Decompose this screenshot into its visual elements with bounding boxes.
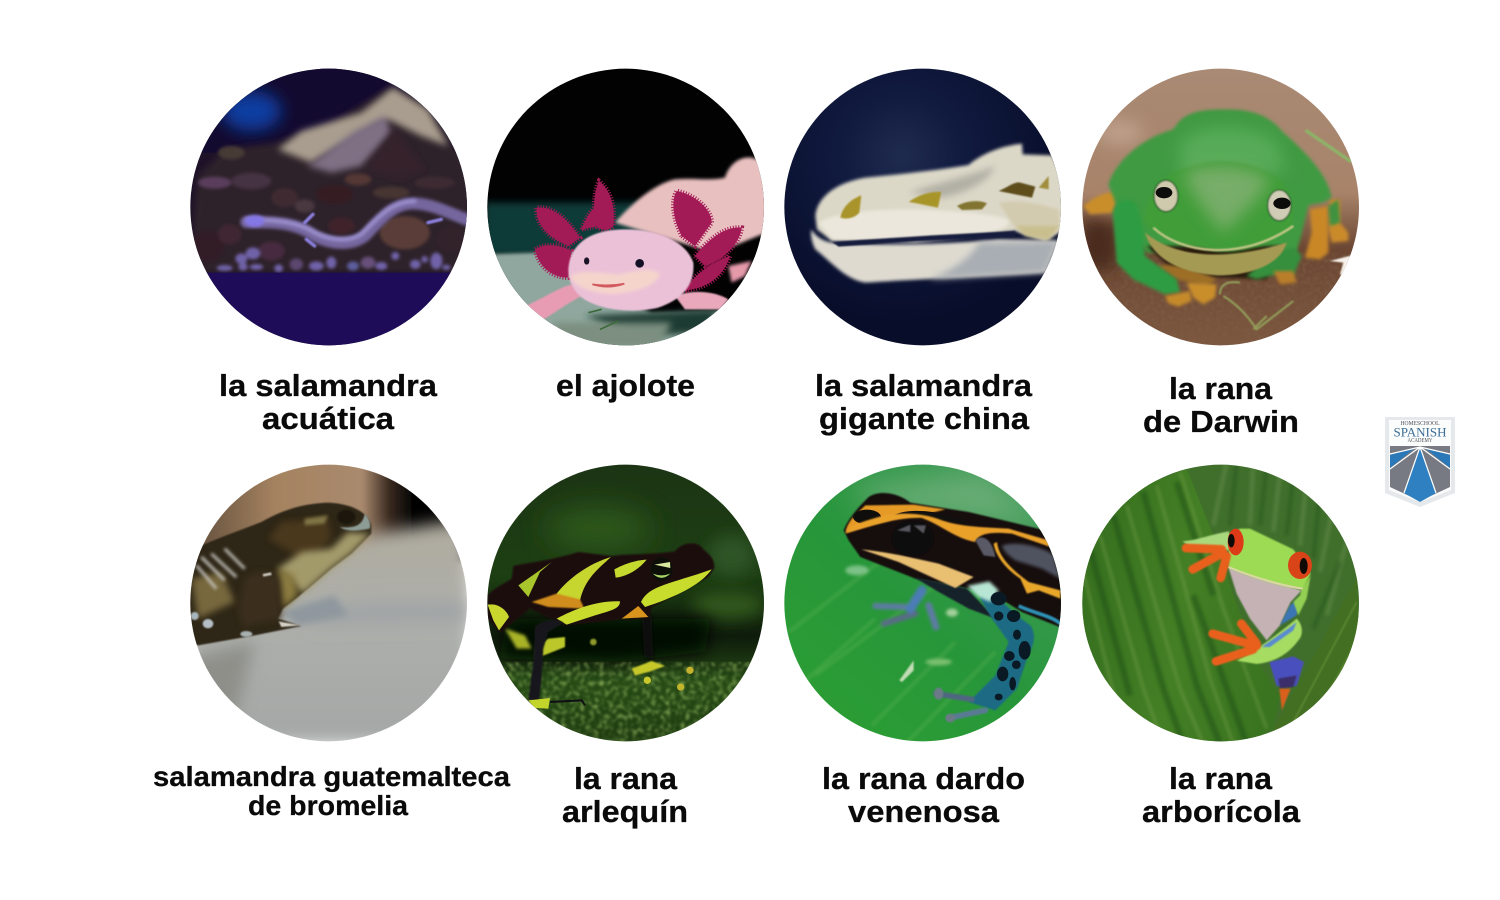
logo: Homeschool Spanish Academy shield: HOMESCHOOL — [1400, 421, 1440, 427]
photo: salamandra guatemalteca de bromelia — [188, 462, 470, 744]
logo: Homeschool Spanish Academy shield — [1385, 417, 1455, 507]
label: la rana arlequín: arlequín — [562, 794, 688, 829]
label: la salamandra acuática: acuática — [262, 401, 395, 436]
label: la salamandra gigante china: gigante china — [819, 401, 1030, 436]
photo: la rana de Darwin — [1080, 66, 1362, 349]
label: la salamandra acuática: la salamandra — [219, 368, 438, 403]
label: la rana arlequín — [562, 761, 688, 829]
label: la rana de Darwin: de Darwin — [1143, 404, 1299, 439]
logo: Homeschool Spanish Academy shield: SPANISH — [1394, 426, 1446, 440]
label: la rana arborícola: la rana — [1169, 761, 1273, 796]
label: la rana de Darwin — [1143, 371, 1299, 439]
label: la rana arlequín: la rana — [574, 761, 678, 796]
photo: la salamandra acuática — [188, 66, 470, 348]
photo: la rana dardo venenosa — [782, 462, 1064, 744]
photo: la rana arlequín — [485, 462, 767, 745]
label: la rana dardo venenosa — [822, 761, 1025, 829]
label: salamandra guatemalteca de bromelia: salamandra guatemalteca — [153, 761, 510, 792]
label: la salamandra gigante china: la salamandra — [815, 368, 1033, 403]
label: la rana dardo venenosa: venenosa — [848, 794, 1000, 829]
label: salamandra guatemalteca de bromelia: de bromelia — [248, 790, 408, 821]
label: la rana arborícola: arborícola — [1142, 794, 1301, 829]
label: la rana arborícola — [1142, 761, 1301, 829]
label: salamandra guatemalteca de bromelia — [153, 761, 510, 821]
label: la salamandra gigante china — [815, 368, 1033, 436]
photo: la rana arborícola — [1080, 462, 1362, 744]
label: la rana dardo venenosa: la rana dardo — [822, 761, 1025, 796]
photo: el ajolote — [485, 66, 767, 348]
logo: Homeschool Spanish Academy shield: ACADEMY — [1408, 438, 1433, 444]
photo: la salamandra gigante china — [782, 66, 1064, 348]
label: el ajolote: el ajolote — [556, 368, 695, 403]
label: la rana de Darwin: la rana — [1169, 371, 1273, 406]
label: la salamandra acuática — [219, 368, 438, 436]
